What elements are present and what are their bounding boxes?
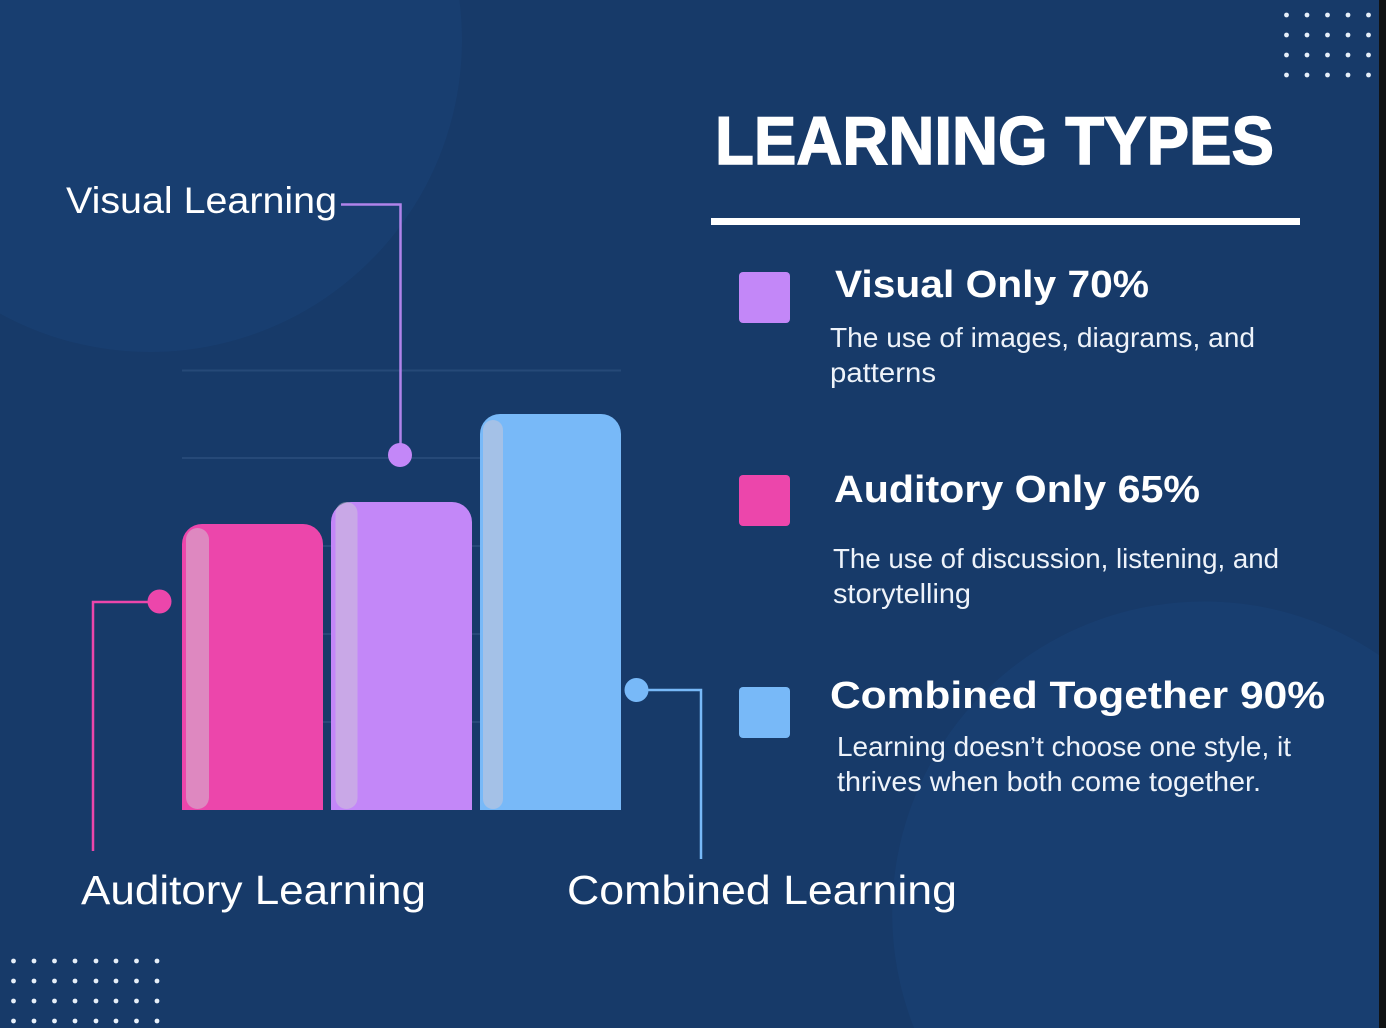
legend item: auditory only — [739, 469, 1279, 609]
background circle: bottom right — [892, 601, 1379, 1028]
callout line: combined learning — [624, 678, 701, 859]
dot pattern: bottom left — [11, 959, 159, 1023]
text: auditory description: The use of discussion, listening, and — [833, 543, 1279, 574]
title underline — [711, 218, 1300, 225]
icon: pink swatch — [739, 475, 790, 526]
bar: combined learning — [480, 414, 621, 810]
text: auditory description — [833, 543, 1279, 609]
dot pattern: top right — [1284, 13, 1371, 77]
bar: auditory learning — [182, 524, 323, 810]
label: combined learning: Combined Learning — [567, 867, 957, 913]
text: visual description — [830, 322, 1255, 388]
text: visual description: The use of images, diagrams, and — [830, 322, 1255, 353]
bar: visual learning — [331, 502, 472, 810]
bar chart — [182, 370, 621, 810]
legend item: combined together — [739, 675, 1325, 797]
heading: visual only 70%: Visual Only 70% — [835, 264, 1149, 306]
text: combined description: Learning doesn’t choose one style, it — [837, 731, 1291, 762]
right edge strip — [1379, 0, 1386, 1028]
icon: blue swatch — [739, 687, 790, 738]
callout line: auditory learning — [93, 590, 172, 851]
text: auditory description: storytelling — [833, 578, 971, 609]
icon: purple swatch — [739, 272, 790, 323]
callout line: visual learning — [341, 204, 412, 467]
text: combined description — [837, 731, 1291, 797]
heading: auditory only 65%: Auditory Only 65% — [834, 469, 1200, 511]
label: visual learning: Visual Learning — [66, 180, 337, 221]
title: LEARNING TYPES — [715, 103, 1274, 179]
text: visual description: patterns — [830, 357, 936, 388]
heading: combined together 90%: Combined Together 90% — [830, 675, 1325, 717]
text: combined description: thrives when both come together. — [837, 766, 1261, 797]
background circle: top left — [0, 0, 462, 352]
label: auditory learning: Auditory Learning — [81, 867, 426, 913]
legend item: visual only — [739, 264, 1255, 388]
